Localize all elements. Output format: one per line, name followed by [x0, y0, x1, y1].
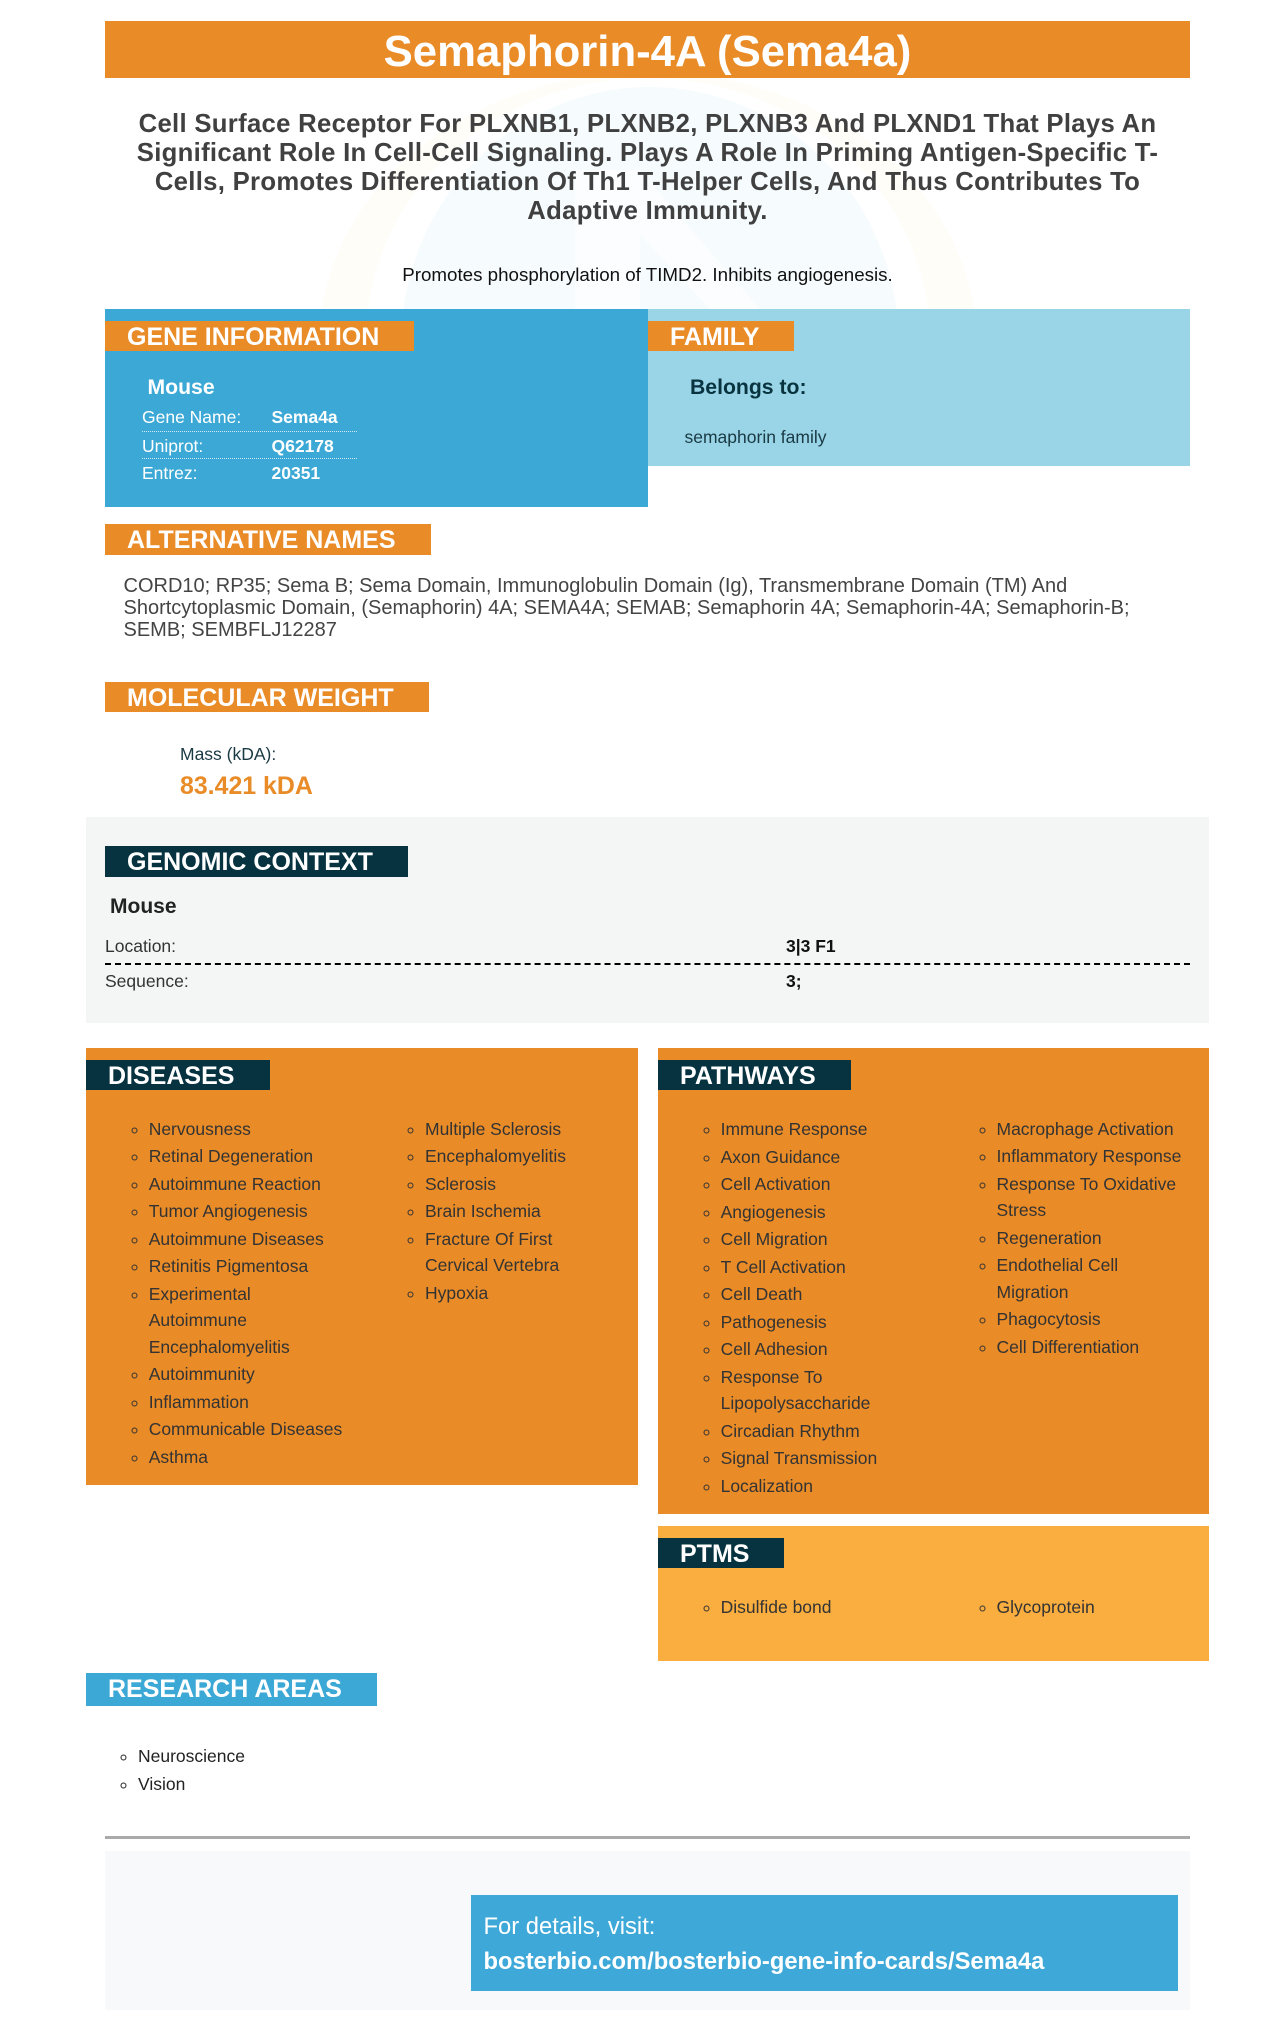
description text: Promotes phosphorylation of TIMD2. Inhibits angiogenesis. [402, 264, 893, 285]
call to action box [471, 1895, 1178, 1991]
sequence row [105, 971, 802, 991]
heading: ptms: PTMS [680, 1540, 749, 1568]
diseases list column 1: Autoimmune Reaction [149, 1174, 321, 1194]
panel: gene information [105, 309, 648, 507]
diseases list column 1: Autoimmunity [149, 1364, 255, 1384]
gene details table: Uniprot: [142, 436, 203, 456]
pathways list column 1: Signal Transmission [721, 1448, 877, 1468]
diseases list column 1: Asthma [149, 1447, 208, 1467]
ptms list column 2: Glycoprotein [996, 1597, 1095, 1617]
pathways list column 2: Regeneration [996, 1228, 1102, 1248]
pathways list column 1: Cell Death [721, 1284, 802, 1304]
diseases list column 1 [132, 1119, 342, 1467]
diseases list column 1: Encephalomyelitis [149, 1337, 290, 1357]
location row: 3|3 F1 [786, 936, 836, 956]
diseases list column 2: Sclerosis [425, 1174, 496, 1194]
diseases list column 1: Inflammation [149, 1392, 249, 1412]
heading: diseases: DISEASES [108, 1062, 234, 1090]
alternative names text [124, 574, 1130, 640]
pathways list column 1: Response To [721, 1366, 822, 1386]
panel: genomic context [86, 817, 1209, 1023]
pathways list column 1: T Cell Activation [721, 1256, 846, 1276]
gene details table [142, 407, 357, 483]
diseases list column 1: Retinal Degeneration [149, 1146, 313, 1166]
alternative names text: SEMB; SEMBFLJ12287 [124, 618, 337, 640]
ptms list column 1: Disulfide bond [721, 1597, 832, 1617]
summary heading: Cells, Promotes Differentiation Of Th1 T-Helper Cells, And Thus Contributes To [155, 168, 1140, 196]
pathways list column 1: Circadian Rhythm [721, 1420, 860, 1440]
gene details table: Gene Name: [142, 407, 241, 427]
diseases list column 1: Communicable Diseases [149, 1419, 342, 1439]
heading: alternative names: ALTERNATIVE NAMES [127, 526, 396, 554]
summary heading: Cell Surface Receptor For PLXNB1, PLXNB2, PLXNB3 And PLXND1 That Plays An [139, 110, 1156, 138]
summary heading: Significant Role In Cell-Cell Signaling. Plays A Role In Priming Antigen-Specific T- [137, 138, 1158, 166]
summary heading [137, 110, 1158, 224]
diseases list column 2: Cervical Vertebra [425, 1255, 559, 1275]
species label: Mouse [110, 894, 177, 918]
sequence row: Sequence: [105, 971, 189, 991]
family value: semaphorin family [684, 427, 826, 447]
research areas list: Vision [138, 1774, 185, 1794]
pathways list column 1: Angiogenesis [721, 1202, 826, 1222]
research areas list [120, 1746, 245, 1794]
species label: Mouse [148, 376, 215, 399]
summary heading: Adaptive Immunity. [527, 196, 768, 224]
title banner: Semaphorin-4A (Sema4a) [384, 27, 911, 76]
gene details table: 20351 [272, 463, 320, 483]
location row [105, 935, 1190, 965]
diseases list column 1: Tumor Angiogenesis [149, 1201, 308, 1221]
heading: genomic context: GENOMIC CONTEXT [127, 848, 373, 876]
pathways list column 1: Immune Response [721, 1119, 867, 1139]
alternative names text: CORD10; RP35; Sema B; Sema Domain, Immunoglobulin Domain (Ig), Transmembrane Domain (TM) And [124, 574, 1067, 596]
panel: pathways [658, 1048, 1209, 1514]
heading: pathways [658, 1060, 851, 1090]
heading: family [648, 321, 794, 351]
diseases list column 2: Fracture Of First [425, 1229, 552, 1249]
heading: research areas [86, 1673, 377, 1706]
research areas list: Neuroscience [138, 1746, 245, 1766]
pathways list column 1 [704, 1119, 877, 1496]
pathways list column 1: Cell Adhesion [721, 1339, 828, 1359]
sequence row: 3; [786, 971, 802, 991]
pathways list column 2: Inflammatory Response [996, 1146, 1181, 1166]
pathways list column 2 [980, 1119, 1181, 1357]
heading: family: FAMILY [670, 323, 759, 351]
diseases list column 2: Multiple Sclerosis [425, 1119, 561, 1139]
alternative names text: Shortcytoplasmic Domain, (Semaphorin) 4A; SEMA4A; SEMAB; Semaphorin 4A; Semaphorin-4A; Semaphorin-B; [124, 596, 1130, 618]
pathways list column 2: Endothelial Cell [996, 1255, 1118, 1275]
location row: Location: [105, 936, 176, 956]
pathways list column 1: Axon Guidance [721, 1146, 840, 1166]
pathways list column 2: Cell Differentiation [996, 1337, 1139, 1357]
pathways list column 1: Localization [721, 1476, 813, 1496]
heading: diseases [86, 1060, 270, 1090]
pathways list column 1: Cell Activation [721, 1174, 831, 1194]
title banner [105, 21, 1190, 78]
pathways list column 2: Response To Oxidative [996, 1174, 1176, 1194]
pathways list column 1: Lipopolysaccharide [721, 1393, 870, 1413]
heading: pathways: PATHWAYS [680, 1062, 816, 1090]
diseases list column 2: Brain Ischemia [425, 1201, 541, 1221]
heading: ptms [658, 1538, 784, 1568]
pathways list column 2: Stress [996, 1200, 1046, 1220]
pathways list column 1: Pathogenesis [721, 1312, 827, 1332]
diseases list column 1: Retinitis Pigmentosa [149, 1256, 308, 1276]
pathways list column 1: Cell Migration [721, 1229, 828, 1249]
watermark logo [404, 87, 896, 309]
belongs to label: Belongs to: [690, 376, 807, 399]
diseases list column 2 [408, 1119, 566, 1303]
gene details table: Sema4a [272, 407, 338, 427]
mass label: Mass (kDA): [180, 744, 276, 764]
heading: research areas: RESEARCH AREAS [108, 1675, 342, 1703]
panel: diseases [86, 1048, 638, 1485]
diseases list column 1: Autoimmune [149, 1310, 247, 1330]
panel: ptms [658, 1526, 1209, 1661]
details label: For details, visit: [484, 1912, 655, 1940]
pathways list column 2: Migration [996, 1282, 1068, 1302]
panel: footer [105, 1851, 1190, 2010]
diseases list column 2: Hypoxia [425, 1283, 488, 1303]
diseases list column 1: Nervousness [149, 1119, 251, 1139]
pathways list column 2: Phagocytosis [996, 1309, 1101, 1329]
gene details table: Q62178 [272, 436, 334, 456]
gene details table: Entrez: [142, 463, 197, 483]
diseases list column 1: Experimental [149, 1284, 251, 1304]
heading: gene information: GENE INFORMATION [127, 323, 379, 351]
details url: bosterbio.com/bosterbio-gene-info-cards/Sema4a [484, 1948, 1044, 1974]
panel: family [648, 309, 1190, 466]
mass value: 83.421 kDA [180, 772, 313, 800]
pathways list column 2: Macrophage Activation [996, 1119, 1174, 1139]
diseases list column 2: Encephalomyelitis [425, 1146, 566, 1166]
heading: molecular weight: MOLECULAR WEIGHT [127, 684, 394, 712]
diseases list column 1: Autoimmune Diseases [149, 1229, 324, 1249]
